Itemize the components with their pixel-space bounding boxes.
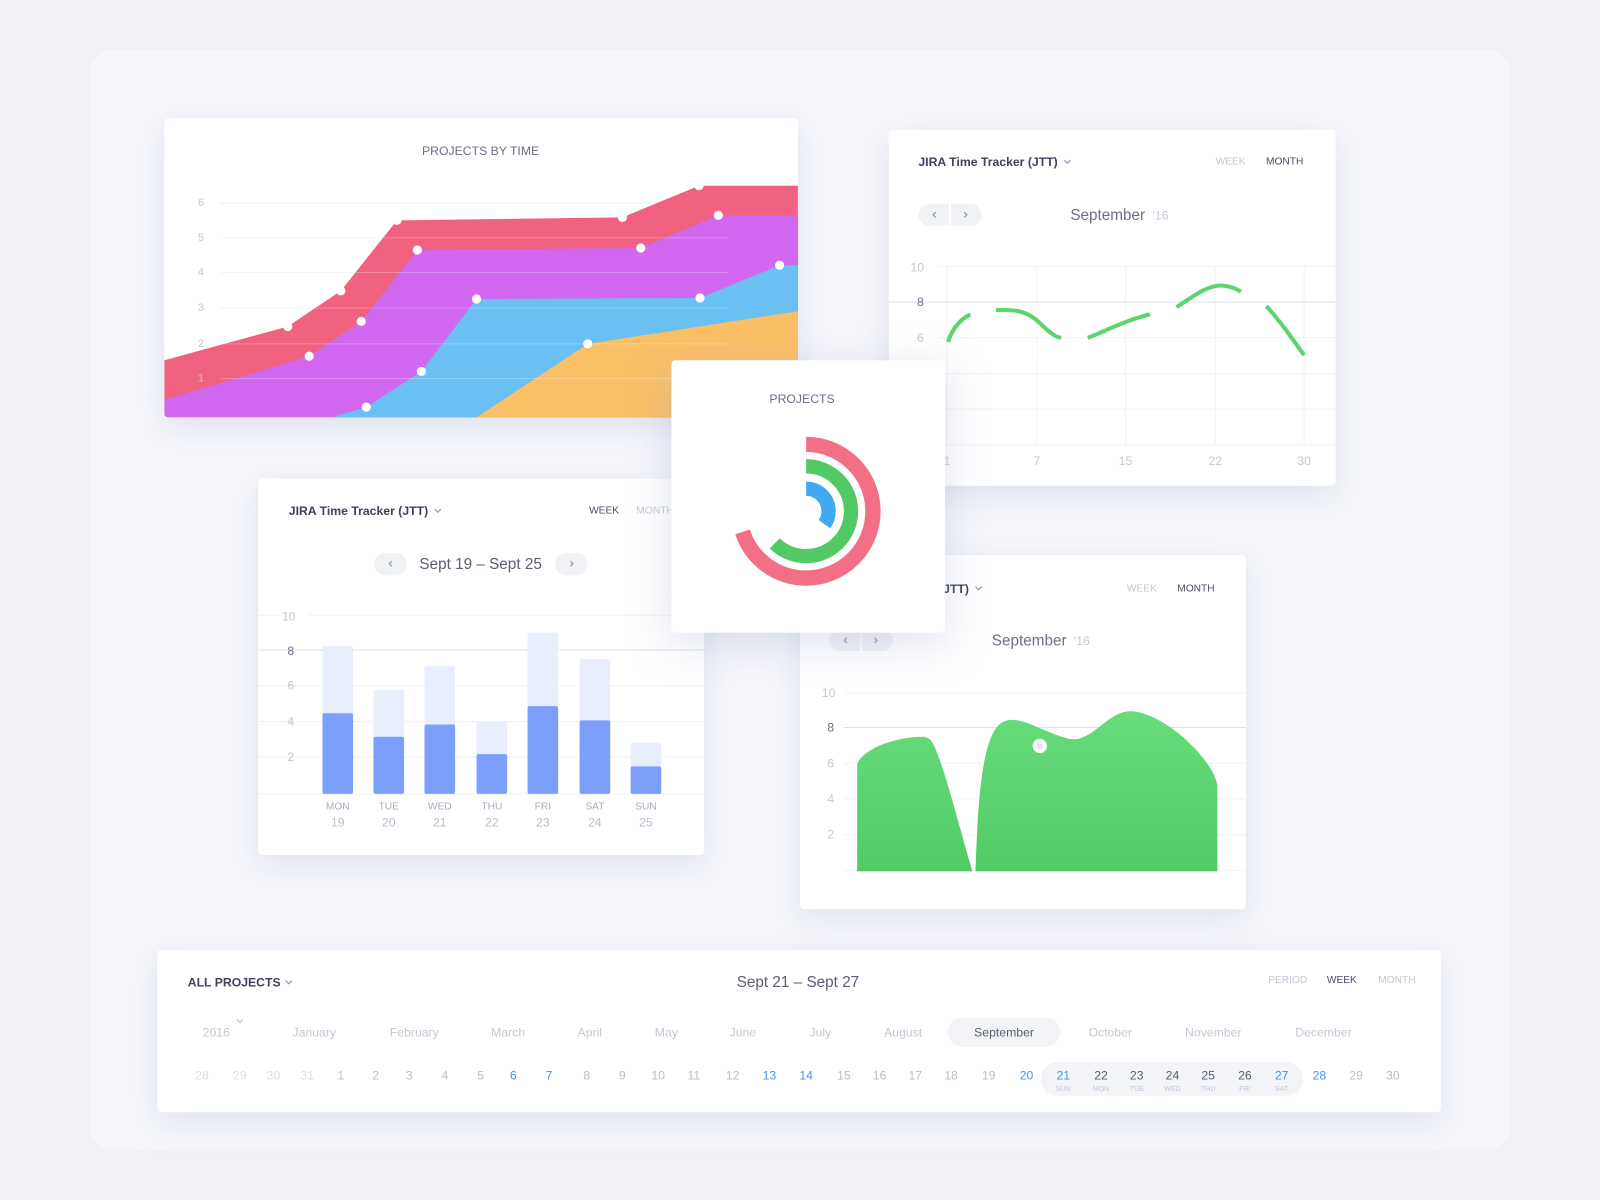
day row: 28: [1313, 1069, 1326, 1083]
y labels: 2: [827, 828, 834, 842]
x labels: FRI: [535, 802, 551, 813]
panel: projects donut: [671, 360, 945, 633]
x labels: THU: [481, 802, 502, 813]
bars: [322, 633, 661, 794]
x labels: 22: [485, 815, 499, 829]
header: [830, 582, 1215, 596]
nav buttons: [830, 630, 893, 651]
header: ALL PROJECTS: [188, 976, 281, 990]
y axis labels: 1: [198, 373, 204, 385]
panel: projects by time: [164, 118, 798, 417]
week navigation: Sept 19 – Sept 25: [419, 556, 542, 573]
day row: 27: [1275, 1069, 1289, 1083]
month row: November: [1185, 1026, 1241, 1040]
day row: 12: [726, 1069, 740, 1083]
axis labels: 22: [1209, 454, 1222, 468]
day row: SAT: [1275, 1085, 1289, 1093]
header: JIRA Time Tracker (JTT): [918, 155, 1058, 169]
month row: February: [390, 1026, 440, 1040]
day row: WED: [1164, 1085, 1181, 1093]
day row: 16: [873, 1069, 887, 1083]
day row: 5: [477, 1069, 484, 1083]
x labels: 24: [588, 815, 602, 829]
header: MONTH: [1378, 975, 1416, 986]
axis labels: 7: [1033, 454, 1040, 468]
day row: 25: [1201, 1069, 1215, 1083]
month row: January: [293, 1026, 337, 1040]
month row: September: [974, 1026, 1034, 1040]
axis labels: [911, 260, 1311, 468]
radial rings: [739, 444, 873, 578]
nav buttons: [918, 204, 982, 226]
day row: 7: [546, 1069, 553, 1083]
day row: 21: [1056, 1069, 1070, 1083]
day row: 30: [267, 1069, 280, 1083]
header: MONTH: [1266, 157, 1303, 168]
header: MONTH: [636, 506, 674, 517]
day row: 10: [651, 1069, 665, 1083]
x labels: 19: [331, 815, 345, 829]
y labels: 8: [827, 721, 834, 735]
day row: 29: [1349, 1069, 1363, 1083]
month row: April: [578, 1026, 602, 1040]
dashed line series: [948, 285, 1304, 355]
day row: 1: [337, 1069, 344, 1083]
header: [289, 504, 674, 518]
day row: 6: [510, 1069, 517, 1083]
x labels: TUE: [379, 802, 399, 813]
day row: 22: [1094, 1069, 1108, 1083]
x labels: SUN: [635, 802, 657, 813]
y labels: 6: [827, 756, 834, 770]
data point: [1033, 739, 1047, 753]
y labels: 10: [282, 609, 296, 623]
data points: [283, 181, 784, 412]
x labels: WED: [428, 802, 452, 813]
y axis labels: 5: [198, 232, 204, 244]
axis labels: 6: [917, 331, 924, 345]
header: MONTH: [1177, 583, 1215, 594]
day row: 14: [799, 1069, 813, 1083]
day row: 3: [406, 1069, 413, 1083]
y axis labels: 4: [198, 266, 204, 278]
y labels: 10: [822, 686, 836, 700]
y labels: [822, 686, 836, 842]
day row: 24: [1166, 1069, 1179, 1083]
day row: 23: [1130, 1069, 1144, 1083]
x labels: SAT: [585, 802, 604, 813]
day row: 19: [982, 1069, 996, 1083]
x labels: MON: [326, 802, 350, 813]
month row: May: [655, 1026, 679, 1040]
day row: [195, 1062, 1400, 1096]
day row: 30: [1386, 1069, 1400, 1083]
day row: 13: [763, 1069, 776, 1083]
day row: MON: [1093, 1085, 1109, 1093]
day row: 18: [944, 1069, 958, 1083]
day row: TUE: [1130, 1085, 1144, 1093]
heading: projects by time: PROJECTS BY TIME: [422, 144, 539, 158]
y labels: 4: [287, 714, 294, 728]
day row: THU: [1201, 1085, 1215, 1093]
y labels: [282, 609, 296, 764]
month row: December: [1295, 1026, 1352, 1040]
month row: 2016: [203, 1026, 230, 1040]
day row: 20: [1020, 1069, 1034, 1083]
header: JIRA Time Tracker (JTT): [289, 504, 428, 518]
panel: calendar period selector: [157, 950, 1441, 1112]
day row: 17: [909, 1069, 922, 1083]
heading: projects: PROJECTS: [769, 392, 835, 406]
y axis labels: 3: [198, 302, 204, 314]
day row: 28: [195, 1069, 209, 1083]
header: JIRA Time Tracker (JTT): [830, 582, 969, 596]
y labels: 2: [287, 750, 294, 764]
y axis labels: [198, 197, 204, 385]
month row: October: [1088, 1026, 1132, 1040]
month row: June: [730, 1026, 756, 1040]
y labels: 8: [287, 644, 294, 658]
x labels: 21: [433, 815, 447, 829]
day row: 9: [619, 1069, 626, 1083]
axis labels: 30: [1297, 454, 1311, 468]
day row: SUN: [1056, 1085, 1071, 1093]
axis labels: 1: [944, 454, 951, 468]
y labels: 4: [827, 792, 834, 806]
y labels: 6: [287, 679, 294, 693]
area chart layers: [164, 186, 798, 417]
day row: 31: [300, 1069, 314, 1083]
panel: monthly area chart: [800, 555, 1246, 909]
month row: July: [810, 1026, 832, 1040]
month title: September '16: [1070, 207, 1169, 224]
green area: [857, 711, 1217, 871]
x labels: 20: [382, 815, 396, 829]
header: [918, 155, 1303, 169]
header: PERIOD: [1268, 975, 1307, 986]
panel: weekly bar chart: [258, 479, 704, 855]
header: WEEK: [1327, 975, 1357, 986]
header: Sept 21 – Sept 27: [737, 974, 859, 991]
y axis labels: 2: [198, 338, 204, 350]
day row: 11: [688, 1069, 700, 1083]
month row: [203, 1017, 1352, 1047]
header: WEEK: [1216, 157, 1246, 168]
week navigation: [374, 553, 588, 576]
month row: March: [491, 1026, 525, 1040]
header: WEEK: [589, 506, 619, 517]
axis labels: 10: [911, 260, 924, 274]
month title: September '16: [992, 632, 1090, 649]
axis labels: 15: [1119, 454, 1133, 468]
day row: 8: [583, 1069, 590, 1083]
day row: 15: [837, 1069, 851, 1083]
day row: 4: [441, 1069, 448, 1083]
y axis labels: 6: [198, 197, 204, 209]
panel: monthly line chart: [889, 130, 1336, 486]
axis labels: 8: [917, 295, 924, 309]
day row: FRI: [1239, 1085, 1251, 1093]
x labels: 23: [536, 815, 550, 829]
day row: 26: [1238, 1069, 1252, 1083]
month row: August: [884, 1026, 923, 1040]
header: [188, 974, 1416, 991]
x labels: [326, 802, 657, 829]
x labels: 25: [639, 815, 653, 829]
day row: 2: [372, 1069, 379, 1083]
day row: 29: [233, 1069, 247, 1083]
header: WEEK: [1127, 583, 1157, 594]
